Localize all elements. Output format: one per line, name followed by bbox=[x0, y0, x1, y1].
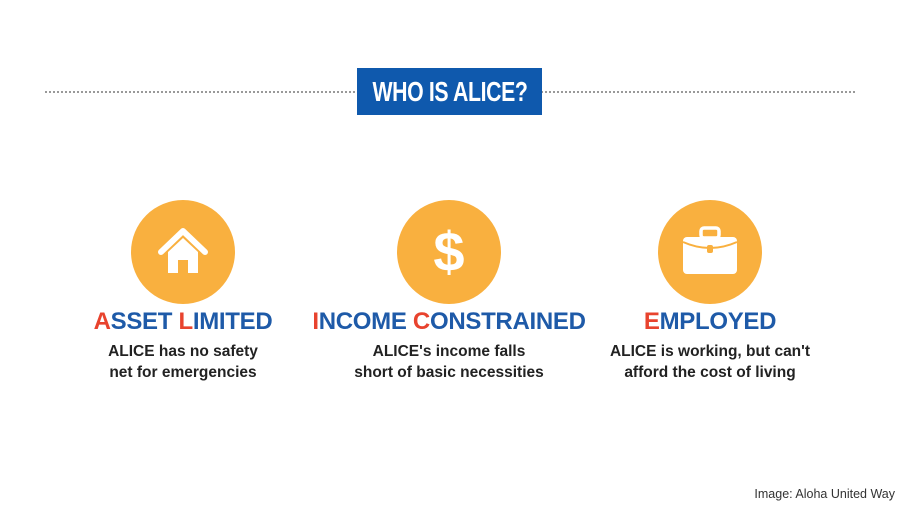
panel: asset limited bbox=[94, 200, 272, 381]
panel: income constrained bbox=[312, 200, 586, 381]
icon: dollar: $ bbox=[433, 220, 465, 283]
text block: ALICE's income falls bbox=[373, 343, 525, 360]
heading: ASSET LIMITED bbox=[94, 308, 272, 335]
icon: house bbox=[131, 200, 235, 304]
heading: EMPLOYED bbox=[644, 308, 776, 335]
text block: net for emergencies bbox=[109, 364, 257, 381]
credit: Image: Aloha United Way bbox=[754, 487, 895, 501]
text block bbox=[610, 343, 810, 381]
title: WHO IS ALICE? bbox=[372, 76, 527, 107]
dotted line bbox=[45, 91, 855, 93]
heading: INCOME CONSTRAINED bbox=[312, 308, 586, 335]
icon: briefcase bbox=[658, 200, 762, 304]
text block: afford the cost of living bbox=[624, 364, 796, 381]
text block bbox=[354, 343, 544, 381]
icon: dollar bbox=[397, 200, 501, 304]
text block: ALICE is working, but can't bbox=[610, 343, 810, 360]
panel: employed bbox=[610, 200, 810, 381]
text block bbox=[108, 343, 258, 381]
text block: short of basic necessities bbox=[354, 364, 544, 381]
title bbox=[357, 68, 542, 115]
text block: ALICE has no safety bbox=[108, 343, 258, 360]
